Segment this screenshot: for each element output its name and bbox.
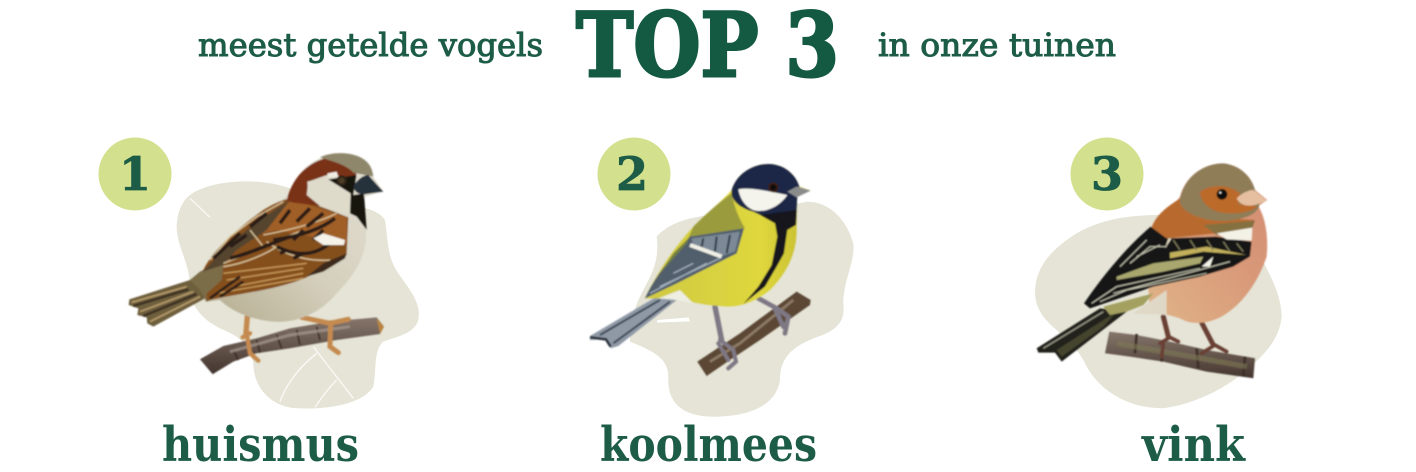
label: koolmees: koolmees: [600, 417, 817, 472]
illustration: huismus: [129, 153, 384, 374]
back: [1152, 198, 1255, 238]
blob background: [177, 181, 419, 409]
tail: [1037, 308, 1127, 362]
tail: [129, 277, 205, 327]
beak: [353, 175, 383, 194]
wing: [1084, 227, 1252, 308]
rank badge 2: 2: [616, 147, 648, 201]
beak: [787, 187, 811, 197]
rump: [1103, 293, 1153, 315]
back: [688, 193, 745, 238]
branch: [200, 317, 384, 374]
branch: [697, 292, 811, 376]
rank badge 3: 3: [1091, 147, 1123, 201]
subtitle left: meest getelde vogels: [198, 26, 543, 64]
panel: vink: [1035, 138, 1282, 408]
beak: [1237, 190, 1267, 206]
rank badge 1: [98, 138, 172, 210]
wing: [203, 198, 348, 301]
illustration: vink: [1037, 163, 1267, 378]
branch: [1105, 332, 1255, 378]
rank badge 2: [598, 138, 670, 210]
wing: [645, 228, 744, 298]
blob background: [630, 202, 853, 417]
illustration: koolmees: [590, 164, 811, 376]
legs: [243, 317, 348, 361]
head: [287, 153, 383, 230]
legs: [1160, 317, 1227, 357]
head: [731, 164, 811, 304]
label: vink: vink: [1141, 417, 1247, 472]
body: [645, 164, 811, 307]
panel: koolmees: [590, 138, 853, 417]
rump: [190, 257, 247, 302]
undertail white: [658, 290, 693, 303]
heading: [198, 0, 1116, 97]
head: [1180, 163, 1267, 221]
label: huismus: huismus: [162, 417, 359, 472]
rank badge 3: [1070, 138, 1144, 210]
body: [203, 154, 383, 322]
panel: huismus: [98, 138, 419, 409]
tail: [590, 297, 677, 348]
blob background: [1035, 215, 1282, 408]
rank badge 1: 1: [119, 147, 151, 201]
subtitle right: in onze tuinen: [878, 26, 1116, 64]
legs: [715, 298, 788, 368]
flank: [1133, 290, 1167, 315]
body: [1147, 163, 1267, 323]
